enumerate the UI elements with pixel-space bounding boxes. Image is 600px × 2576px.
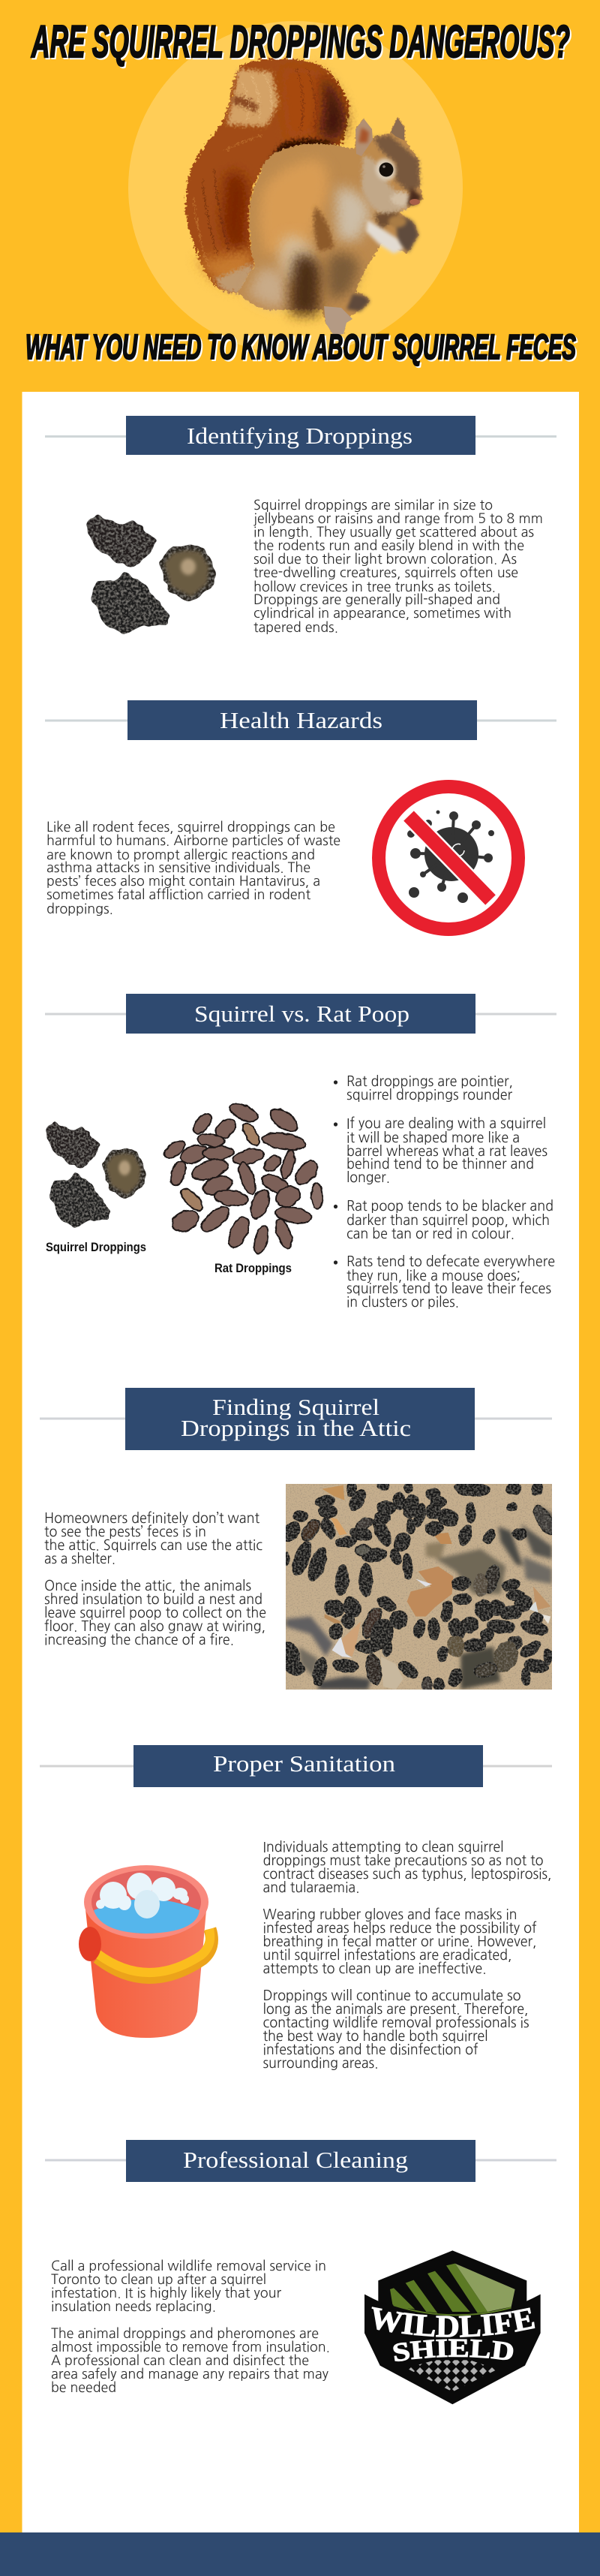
heading: Proper Sanitation	[134, 1745, 483, 1787]
text: proper sanitation: contacting wildlife removal professionals is	[262, 2015, 530, 2030]
text: proper sanitation: infested areas helps reduce the possibility of	[262, 1921, 537, 1935]
text: proper sanitation: long as the animals are present. Therefore,	[262, 2002, 528, 2016]
heading rule	[45, 1013, 556, 1015]
text: identifying droppings: tree-dwelling creatures, squirrels often use	[254, 566, 518, 579]
text: professional cleaning: infestation. It is highly likely that your	[51, 2286, 281, 2300]
image: squirrel droppings	[86, 513, 214, 633]
bullet list: rat vs squirrel	[334, 1074, 555, 1309]
text: identifying droppings: Droppings are generally pill-shaped and	[254, 593, 500, 606]
section: finding droppings in the attic	[40, 1388, 559, 1692]
icon: no virus sign	[379, 787, 518, 929]
text: identifying droppings: the rodents run and easily blend in with the	[254, 539, 524, 552]
heading rule	[45, 435, 556, 438]
bullet list: rat vs squirrel: longer.	[346, 1170, 390, 1184]
heading: Squirrel vs. Rat Poop	[126, 994, 476, 1034]
text: proper sanitation: droppings must take precautions so as not to	[262, 1853, 543, 1867]
text: proper sanitation: surrounding areas.	[262, 2056, 378, 2070]
text: attic: floor. They can also gnaw at wiring,	[44, 1619, 266, 1633]
text: proper sanitation: breathing in fecal matter or urine. However,	[262, 1934, 537, 1949]
text: proper sanitation: Wearing rubber gloves and face masks in	[262, 1907, 518, 1921]
text: proper sanitation: contract diseases such as typhus, leptospirosis,	[262, 1867, 552, 1881]
logo: Wildlife Shield: WILDLIFE	[372, 2307, 536, 2337]
bullet list: rat vs squirrel: in clusters or piles.	[346, 1295, 459, 1309]
text: professional cleaning: almost impossible to remove from insulation.	[51, 2340, 330, 2354]
bullet list: rat vs squirrel: Rat droppings are pointier,	[346, 1074, 513, 1088]
text: identifying droppings: soil due to their light brown coloration. As	[254, 552, 517, 566]
text: professional cleaning: be needed	[51, 2381, 116, 2394]
text: proper sanitation: Droppings will continue to accumulate so	[262, 1988, 520, 2003]
text: identifying droppings: jellybeans or raisins and range from 5 to 8 mm	[254, 512, 543, 527]
image: attic droppings photo	[279, 1480, 559, 1692]
section: squirrel vs rat poop	[45, 994, 556, 1309]
text: attic: the attic. Squirrels can use the attic	[44, 1538, 262, 1552]
section: identifying droppings	[45, 416, 556, 634]
heading: Finding Squirrel Droppings in the Attic: Droppings in the Attic	[181, 1415, 411, 1441]
bullet list: rat vs squirrel: behind tend to be thinner and	[346, 1157, 534, 1171]
bullet list: rat vs squirrel: it will be shaped more like a	[346, 1130, 520, 1145]
heading: Finding Squirrel Droppings in the Attic	[125, 1388, 475, 1450]
bullet list: rat vs squirrel: Rat poop tends to be blacker and	[346, 1199, 554, 1213]
text: proper sanitation: attempts to clean up are ineffective.	[262, 1961, 486, 1976]
text: professional cleaning: Toronto to clean up after a squirrel	[51, 2273, 266, 2286]
text: health hazards: droppings.	[46, 902, 113, 916]
text: proper sanitation: Individuals attempting to clean squirrel	[262, 1840, 504, 1854]
text: proper sanitation: the best way to handle both squirrel	[262, 2029, 488, 2043]
heading rule	[40, 1417, 552, 1420]
label: squirrel droppings: Squirrel Droppings	[46, 1240, 146, 1254]
squirrel head details	[324, 118, 422, 336]
text: attic: Once inside the attic, the animals	[44, 1578, 251, 1593]
text: health hazards: harmful to humans. Airborne particles of waste	[46, 834, 340, 847]
text: attic: leave squirrel poop to collect on the	[44, 1605, 266, 1620]
text: health hazards: asthma attacks in sensitive individuals. The	[46, 861, 310, 874]
text: attic: increasing the chance of a fire.	[44, 1633, 234, 1647]
text: professional cleaning: Call a professional wildlife removal service in	[51, 2259, 326, 2273]
text: health hazards: sometimes fatal affliction carried in rodent	[46, 888, 310, 901]
text: identifying droppings: in length. They usually get scattered about as	[254, 525, 534, 539]
squirrel illustration	[185, 59, 423, 336]
text: identifying droppings: cylindrical in appearance, sometimes with	[254, 606, 512, 620]
bullet list: rat vs squirrel: If you are dealing with a squirrel	[346, 1116, 546, 1130]
text: attic: Homeowners definitely don’t want	[44, 1511, 260, 1525]
text: professional cleaning: The animal droppings and pheromones are	[51, 2327, 319, 2340]
bullet list: rat vs squirrel: they run, like a mouse does;	[346, 1268, 520, 1283]
heading rule	[45, 719, 556, 722]
label: rat droppings: Rat Droppings	[214, 1261, 292, 1275]
heading rule	[40, 1765, 552, 1767]
text: professional cleaning: area safely and manage any repairs that may	[51, 2367, 329, 2381]
section: health hazards	[45, 700, 556, 929]
logo: Wildlife Shield	[364, 2250, 541, 2405]
image: rat droppings	[161, 1100, 323, 1255]
text: professional cleaning: insulation needs replacing.	[51, 2300, 216, 2313]
section: professional cleaning	[45, 2140, 556, 2405]
image: squirrel droppings small	[46, 1120, 145, 1227]
text: attic	[44, 1511, 266, 1647]
text: identifying droppings: tapered ends.	[254, 621, 338, 634]
heading: Proper Sanitation: Proper Sanitation	[213, 1750, 396, 1777]
text: attic: to see the pests’ feces is in	[44, 1524, 206, 1539]
bullet list: rat vs squirrel: can be tan or red in colour.	[346, 1226, 514, 1241]
squirrel tail	[185, 59, 349, 294]
text: attic: as a shelter.	[44, 1551, 116, 1566]
text: proper sanitation: until squirrel infestations are eradicated,	[262, 1948, 512, 1962]
text: health hazards	[46, 820, 340, 916]
bullet list: rat vs squirrel: squirrels tend to leave their feces	[346, 1281, 551, 1296]
section: proper sanitation	[40, 1745, 552, 2070]
bullet list: rat vs squirrel: barrel whereas what a rat leaves	[346, 1144, 548, 1158]
white content panel	[22, 392, 579, 2532]
heading: Health Hazards	[128, 700, 477, 740]
heading: Squirrel vs. Rat Poop: Squirrel vs. Rat Poop	[194, 1001, 410, 1027]
text: professional cleaning	[51, 2259, 330, 2394]
text: proper sanitation: and tularaemia.	[262, 1880, 360, 1894]
text: identifying droppings	[254, 498, 543, 634]
heading: Identifying Droppings	[126, 416, 476, 455]
text: attic: shred insulation to build a nest and	[44, 1592, 262, 1606]
text: identifying droppings: Squirrel droppings are similar in size to	[254, 498, 493, 512]
heading: Identifying Droppings: Identifying Droppings	[187, 423, 412, 449]
heading rule	[45, 2159, 556, 2162]
text: health hazards: Like all rodent feces, squirrel droppings can be	[46, 820, 335, 834]
squirrel body	[238, 117, 423, 335]
hero: squirrel on pale oval	[26, 17, 576, 366]
footer band	[0, 2532, 600, 2576]
text: health hazards: pests’ feces also might contain Hantavirus, a	[46, 874, 320, 888]
text: health hazards: are known to prompt allergic reactions and	[46, 848, 315, 862]
bullet list: rat vs squirrel: squirrel droppings rounder	[346, 1088, 512, 1102]
heading: Finding Squirrel Droppings in the Attic: Finding Squirrel	[212, 1394, 380, 1420]
bullet list: rat vs squirrel: Rats tend to defecate everywhere	[346, 1254, 555, 1268]
text: identifying droppings: hollow crevices in tree trunks as toilets.	[254, 580, 496, 594]
pale oval behind squirrel	[128, 21, 463, 354]
heading: Professional Cleaning: Professional Cleaning	[183, 2147, 408, 2173]
heading: Health Hazards: Health Hazards	[220, 707, 382, 733]
bullet list: rat vs squirrel: darker than squirrel poop, which	[346, 1213, 550, 1227]
logo: Wildlife Shield: SHIELD	[393, 2339, 513, 2361]
text: proper sanitation: infestations and the disinfection of	[262, 2042, 478, 2057]
text: proper sanitation	[262, 1840, 552, 2070]
icon: soapy water bucket	[79, 1865, 212, 2038]
heading: Professional Cleaning	[126, 2140, 476, 2182]
text: professional cleaning: A professional can clean and disinfect the	[51, 2354, 309, 2367]
